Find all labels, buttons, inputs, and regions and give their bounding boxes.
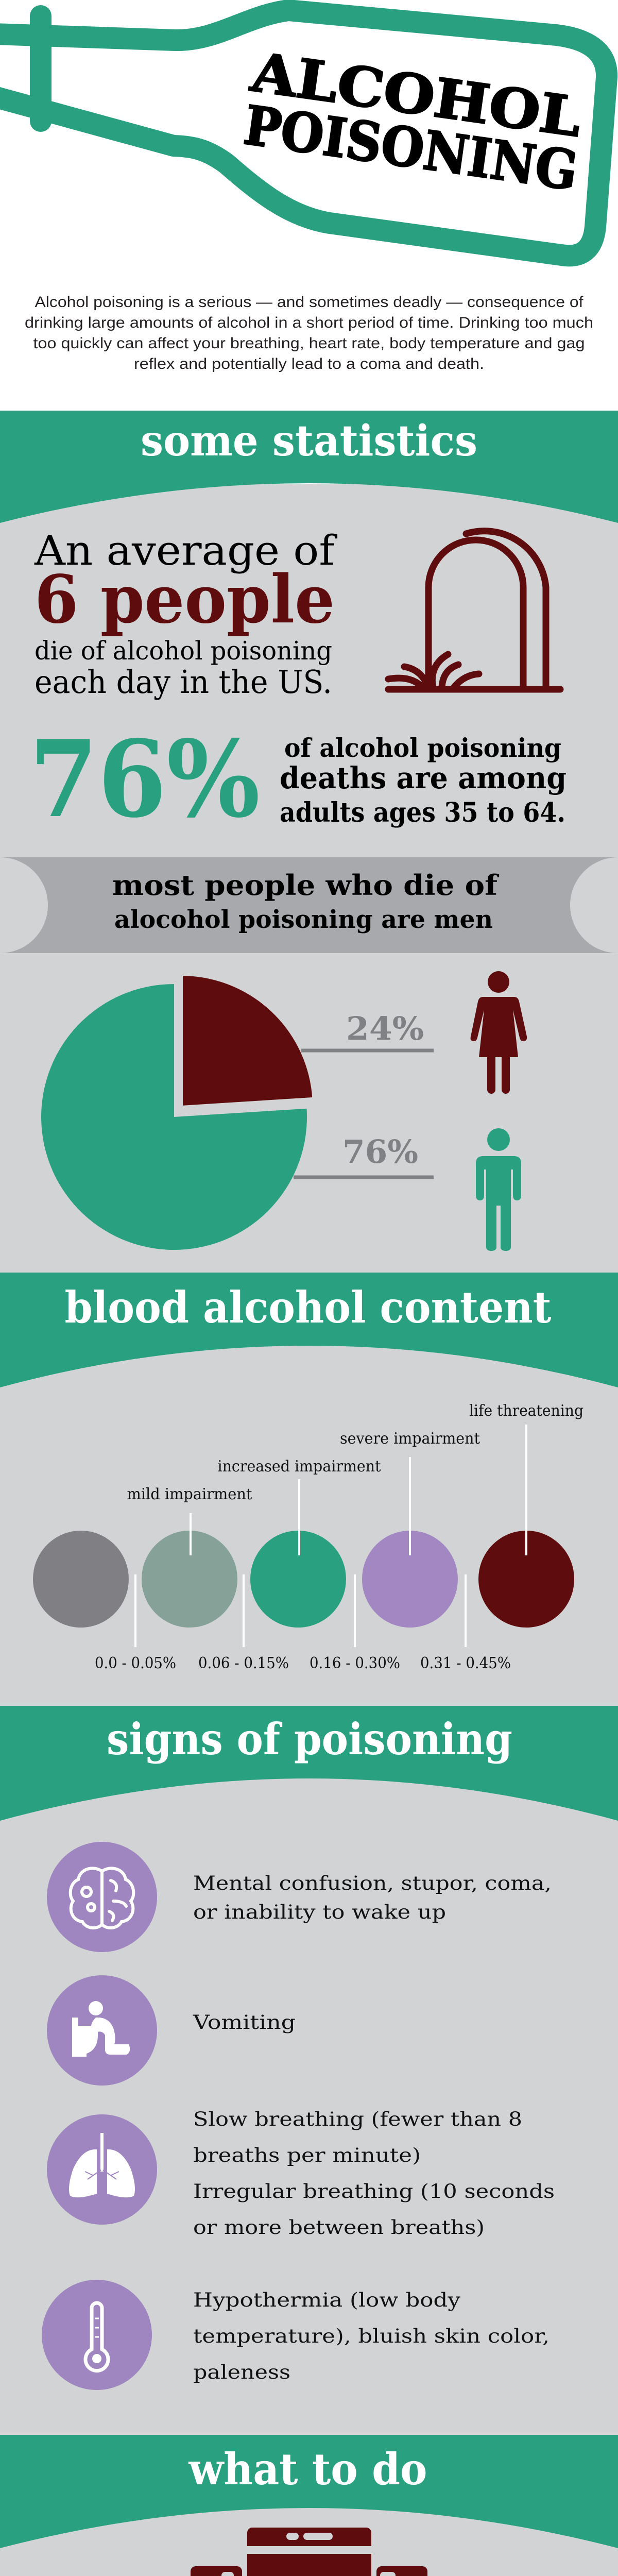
stat: 6 people per day bbox=[34, 527, 338, 701]
BAC impairment labels: life threatening bbox=[469, 1402, 583, 1420]
BAC impairment labels: severe impairment bbox=[340, 1430, 480, 1448]
banner: most people who die are men: most people who die of bbox=[112, 869, 500, 902]
stat: 6 people per day: An average of bbox=[34, 527, 338, 574]
chart: BAC levels circles bbox=[33, 1425, 574, 1647]
header band: blood alcohol content: blood alcohol content bbox=[65, 1282, 552, 1333]
header band: blood alcohol content bbox=[0, 1273, 618, 1387]
intro text: too quickly can affect your breathing, heart rate, body temperature and gag bbox=[33, 335, 585, 352]
stat: 6 people per day: die of alcohol poisoning bbox=[35, 636, 332, 666]
BAC range labels bbox=[95, 1654, 511, 1672]
header band: what to do: what to do bbox=[188, 2444, 427, 2495]
stat: 76% ages 35 to 64: deaths are among bbox=[280, 760, 566, 795]
banner: most people who die are men bbox=[0, 857, 618, 953]
stat: 6 people per day: 6 people bbox=[35, 561, 335, 638]
text: breathing: breaths per minute) bbox=[193, 2144, 421, 2166]
text: mental confusion: Mental confusion, stupor, coma, bbox=[193, 1872, 552, 1894]
label: 76% men: 76% bbox=[342, 1133, 418, 1171]
stat: 76% ages 35 to 64: adults ages 35 to 64. bbox=[280, 797, 565, 828]
title: Alcohol Poisoning bbox=[241, 40, 585, 202]
text: mental confusion bbox=[193, 1872, 552, 1923]
stat: 76% ages 35 to 64: of alcohol poisoning bbox=[284, 733, 561, 763]
text: hypothermia: temperature), bluish skin color, bbox=[193, 2325, 550, 2347]
stat: 76% ages 35 to 64 bbox=[29, 718, 566, 841]
BAC impairment labels: mild impairment bbox=[127, 1485, 252, 1503]
header band: signs of poisoning bbox=[0, 1706, 618, 1821]
text: breathing: or more between breaths) bbox=[193, 2216, 485, 2239]
header band: some statistics: some statistics bbox=[141, 416, 477, 466]
intro text: Alcohol poisoning is a serious — and sometimes deadly — consequence of bbox=[35, 294, 583, 311]
icon: tombstone bbox=[388, 531, 560, 689]
title: Alcohol Poisoning: ALCOHOL bbox=[247, 40, 585, 149]
icon: man bbox=[476, 1128, 521, 1251]
icon: phones call 911 bbox=[190, 2526, 428, 2576]
stat: 76% ages 35 to 64: 76% bbox=[29, 718, 260, 841]
text: breathing: Slow breathing (fewer than 8 bbox=[193, 2108, 522, 2130]
icon: brain bbox=[47, 1842, 157, 1952]
icon: vomiting bbox=[47, 1975, 157, 2086]
header band: what to do bbox=[0, 2435, 618, 2548]
text: hypothermia bbox=[193, 2289, 550, 2383]
text: breathing bbox=[193, 2108, 555, 2239]
intro text bbox=[25, 294, 593, 372]
header band: some statistics bbox=[0, 411, 618, 523]
BAC range labels: 0.0 - 0.05% bbox=[95, 1654, 176, 1672]
BAC range labels: 0.06 - 0.15% bbox=[198, 1654, 289, 1672]
text: hypothermia: paleness bbox=[193, 2361, 290, 2383]
BAC impairment labels bbox=[127, 1402, 583, 1503]
text: vomiting: Vomiting bbox=[193, 2011, 296, 2033]
title bottle illustration bbox=[0, 5, 607, 256]
icon: thermometer bbox=[42, 2280, 152, 2390]
BAC impairment labels: increased impairment bbox=[217, 1458, 381, 1476]
intro text: reflex and potentially lead to a coma and death. bbox=[134, 355, 484, 372]
banner: most people who die are men: alocohol poisoning are men bbox=[114, 905, 493, 934]
title: Alcohol Poisoning: POISONING bbox=[241, 93, 581, 202]
icon: lungs bbox=[47, 2114, 157, 2225]
icon: woman bbox=[471, 971, 527, 1094]
BAC range labels: 0.31 - 0.45% bbox=[420, 1654, 511, 1672]
pie chart: men vs women bbox=[41, 974, 314, 1250]
BAC range labels: 0.16 - 0.30% bbox=[310, 1654, 400, 1672]
text: breathing: Irregular breathing (10 seconds bbox=[193, 2180, 555, 2202]
text: mental confusion: or inability to wake up bbox=[193, 1901, 446, 1923]
text: hypothermia: Hypothermia (low body bbox=[193, 2289, 460, 2311]
header band: signs of poisoning: signs of poisoning bbox=[107, 1714, 512, 1765]
label: 24% women: 24% bbox=[346, 1010, 424, 1047]
stat: 6 people per day: each day in the US. bbox=[35, 663, 332, 701]
intro text: drinking large amounts of alcohol in a short period of time. Drinking too much bbox=[25, 314, 593, 331]
